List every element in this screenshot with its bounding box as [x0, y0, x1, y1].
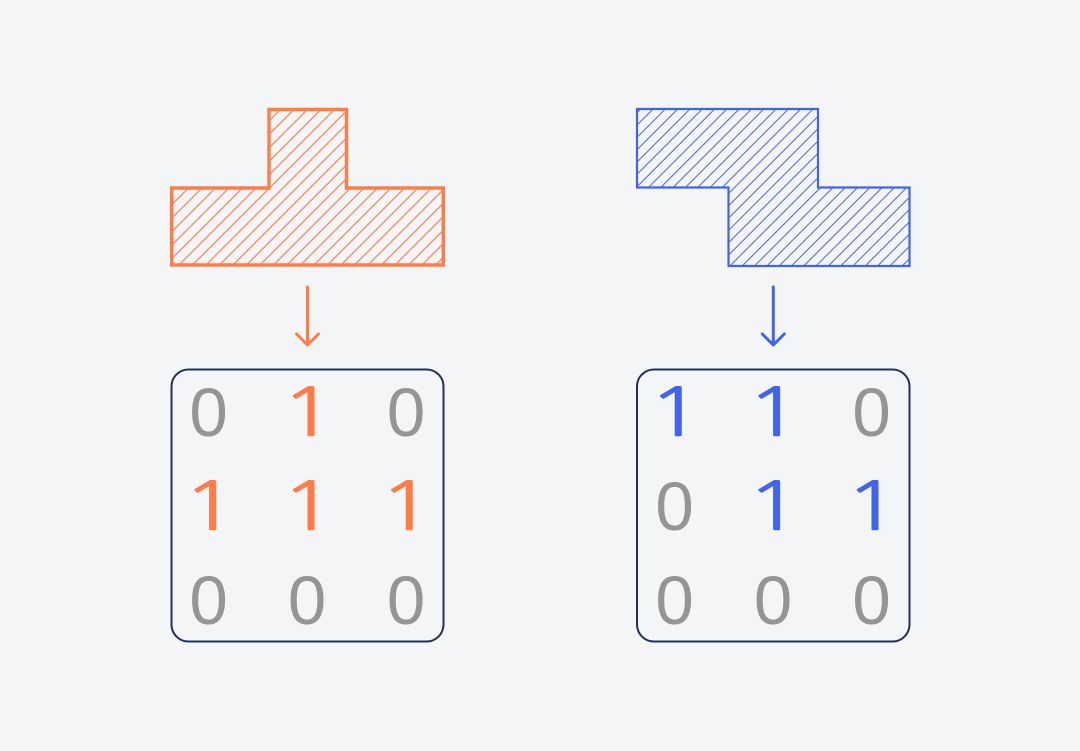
matrix digits: blue: 0 — [852, 562, 891, 639]
matrix digits: orange: 0 — [189, 374, 228, 451]
matrix digits: blue: 0 — [655, 468, 694, 545]
matrix digits: blue — [647, 374, 900, 639]
matrix digits: blue: 1 — [745, 472, 802, 540]
matrix digits: orange: 1 — [280, 472, 336, 540]
matrix digits: orange: 0 — [387, 562, 425, 639]
matrix digits: blue: 0 — [655, 562, 694, 639]
panel: blue matrix — [637, 370, 910, 642]
matrix digits: orange: 1 — [280, 378, 336, 446]
matrix digits: orange: 0 — [189, 562, 228, 639]
hatched T shape — [172, 110, 443, 265]
matrix digits: orange: 1 — [181, 472, 238, 540]
hatched Z shape — [637, 109, 910, 266]
matrix digits: blue: 1 — [745, 378, 802, 446]
matrix digits: orange: 1 — [378, 472, 435, 540]
arrow: blue down — [762, 287, 784, 345]
matrix digits: blue: 1 — [647, 378, 704, 446]
panel: blue Z shape — [637, 109, 910, 266]
matrix digits: blue: 0 — [852, 374, 891, 451]
matrix digits: orange: 0 — [387, 374, 425, 451]
panel: orange matrix — [172, 370, 444, 642]
matrix digits: orange: 0 — [288, 562, 326, 639]
arrow: orange down — [296, 287, 318, 345]
matrix digits: orange — [181, 374, 435, 639]
matrix digits: blue: 0 — [754, 562, 792, 639]
matrix digits: blue: 1 — [844, 472, 900, 540]
panel: orange T shape — [172, 110, 443, 265]
